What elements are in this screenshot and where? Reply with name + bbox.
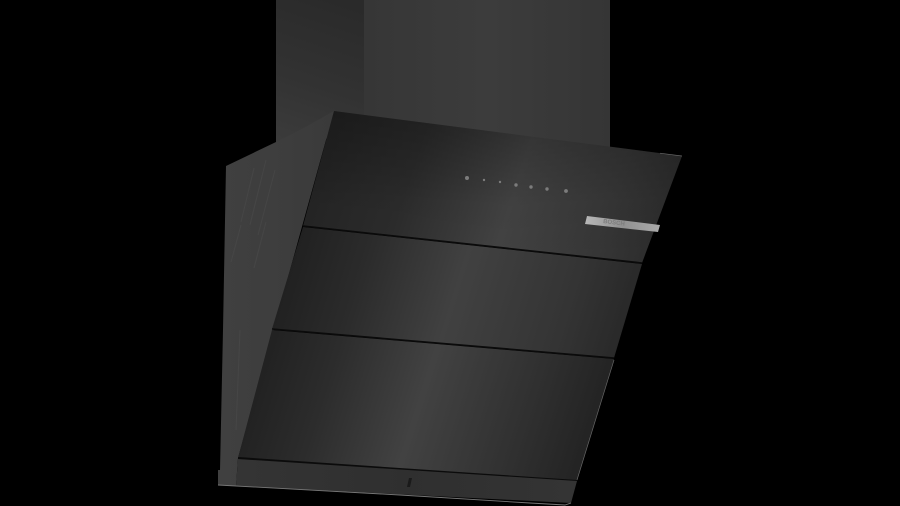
front glass: bottom panel [238, 330, 614, 481]
panel dividers [238, 226, 642, 481]
brand strip [585, 216, 660, 232]
side panel pleat lines [231, 160, 275, 430]
chimney duct: front face [364, 0, 610, 150]
trim switch [407, 478, 412, 487]
trim highlight [218, 485, 571, 505]
bottom trim band [218, 459, 577, 505]
side panel [218, 111, 334, 486]
front glass: top panel [303, 111, 682, 263]
chimney duct: shaded left face [276, 0, 365, 150]
brand strip: BOSCH [603, 219, 625, 228]
glass edge highlights [577, 153, 682, 480]
front glass: middle panel [272, 227, 642, 358]
control buttons [465, 176, 568, 193]
